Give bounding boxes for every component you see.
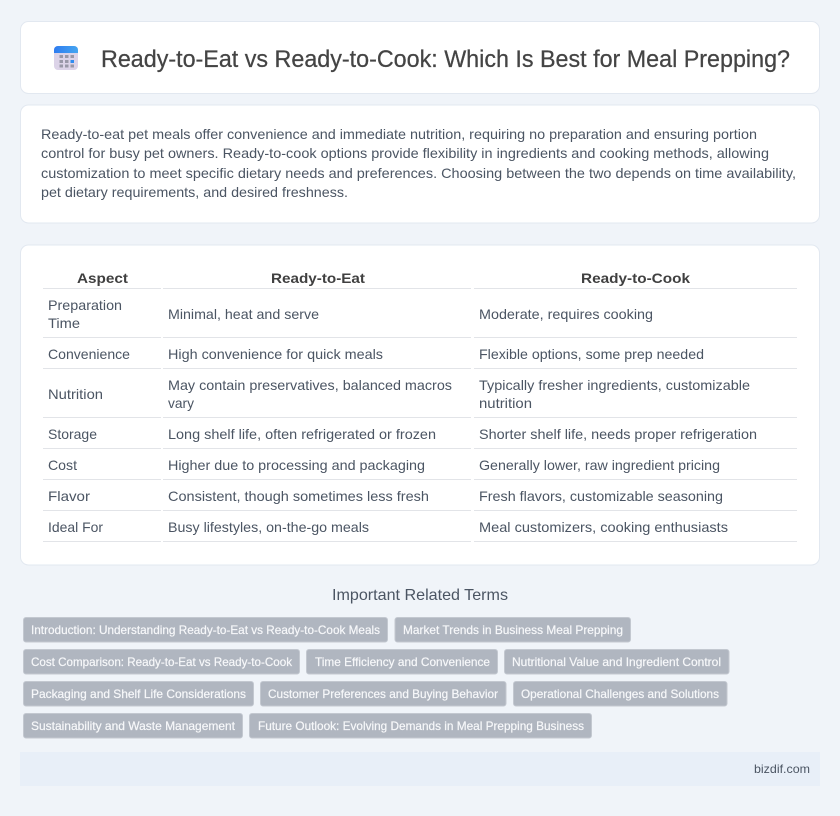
row: cost: Generally lower, raw ingredient pricing (479, 457, 720, 473)
row: preparation time: Time (48, 315, 80, 331)
row: convenience: High convenience for quick meals (168, 346, 383, 362)
tag: packaging (24, 682, 254, 706)
text block: introduction: pet dietary requirements, and desired freshness. (41, 184, 348, 200)
row: preparation time: Preparation (48, 297, 122, 313)
tag: customer preferences (260, 682, 506, 706)
panel: introduction (20, 105, 820, 223)
row: nutrition (48, 377, 750, 411)
row: ideal for: Ideal For (48, 519, 103, 535)
row: ideal for: Busy lifestyles, on-the-go meals (168, 519, 369, 535)
tag: sustainability (24, 714, 242, 738)
row: cost: Cost (48, 457, 77, 473)
tag: introduction (24, 618, 388, 642)
row: flavor (48, 488, 723, 504)
panel: header (20, 22, 820, 94)
row: storage: Storage (48, 426, 97, 442)
row: convenience: Convenience (48, 346, 130, 362)
row: cost (48, 457, 720, 473)
tag: operational challenges: Operational Challenges and Solutions (521, 687, 719, 701)
footer: bizdif.com (754, 762, 810, 776)
row: nutrition: nutrition (479, 395, 532, 411)
title: Ready-to-Eat vs Ready-to-Cook: Which Is Best for Meal Prepping? (101, 46, 790, 73)
tag: time efficiency: Time Efficiency and Convenience (315, 655, 490, 669)
panel: related term tags (24, 618, 729, 738)
row: storage: Shorter shelf life, needs proper refrigeration (479, 426, 757, 442)
panel: comparison table (20, 245, 820, 565)
row: nutrition: Typically fresher ingredients, customizable (479, 377, 750, 393)
table header (77, 270, 690, 286)
row: ideal for (48, 519, 728, 535)
table header: Aspect (77, 270, 128, 286)
text block: introduction: Ready-to-eat pet meals offer convenience and immediate nutrition, requiring no preparation and ensuring portion (41, 126, 757, 142)
row: storage (48, 426, 757, 442)
row: convenience (48, 346, 704, 362)
row: storage: Long shelf life, often refrigerated or frozen (168, 426, 436, 442)
text block: introduction (41, 126, 796, 200)
row: preparation time (48, 297, 653, 331)
footer (20, 752, 820, 786)
row: convenience: Flexible options, some prep needed (479, 346, 704, 362)
tag: sustainability: Sustainability and Waste Management (31, 719, 236, 733)
tag: introduction: Introduction: Understanding Ready-to-Eat vs Ready-to-Cook Meals (31, 623, 380, 637)
icon: calendar (54, 46, 78, 70)
tag: market trends: Market Trends in Business Meal Prepping (403, 623, 623, 637)
tag: nutritional value (504, 650, 729, 674)
tag: cost comparison: Cost Comparison: Ready-to-Eat vs Ready-to-Cook (31, 655, 293, 669)
tag: future outlook: Future Outlook: Evolving Demands in Meal Prepping Business (258, 719, 584, 733)
text block: introduction: control for busy pet owners. Ready-to-cook options provide flexibility in ingredients and cooking methods, allowing (41, 145, 769, 161)
row: nutrition: Nutrition (48, 386, 103, 402)
row: flavor: Flavor (48, 488, 90, 504)
tag: packaging: Packaging and Shelf Life Considerations (31, 687, 246, 701)
row: flavor: Fresh flavors, customizable seasoning (479, 488, 723, 504)
tag: nutritional value: Nutritional Value and Ingredient Control (512, 655, 721, 669)
tag: cost comparison (24, 650, 300, 674)
tag: time efficiency (306, 650, 498, 674)
table header: Ready-to-Cook (581, 270, 690, 286)
row: ideal for: Meal customizers, cooking enthusiasts (479, 519, 728, 535)
tag: future outlook (250, 714, 592, 738)
row: flavor: Consistent, though sometimes less fresh (168, 488, 429, 504)
text block: introduction: customization to meet specific dietary needs and preferences. Choosing between the two depends on time availability, (41, 165, 796, 181)
tag: market trends (395, 618, 630, 642)
row: preparation time: Moderate, requires cooking (479, 306, 653, 322)
tag: operational challenges (514, 682, 727, 706)
row: cost: Higher due to processing and packaging (168, 457, 425, 473)
table header: Ready-to-Eat (271, 270, 365, 286)
heading: important related terms: Important Related Terms (332, 587, 508, 604)
tag: customer preferences: Customer Preferences and Buying Behavior (268, 687, 498, 701)
row: nutrition: May contain preservatives, balanced macros (168, 377, 452, 393)
row: nutrition: vary (168, 395, 194, 411)
row: preparation time: Minimal, heat and serve (168, 306, 319, 322)
